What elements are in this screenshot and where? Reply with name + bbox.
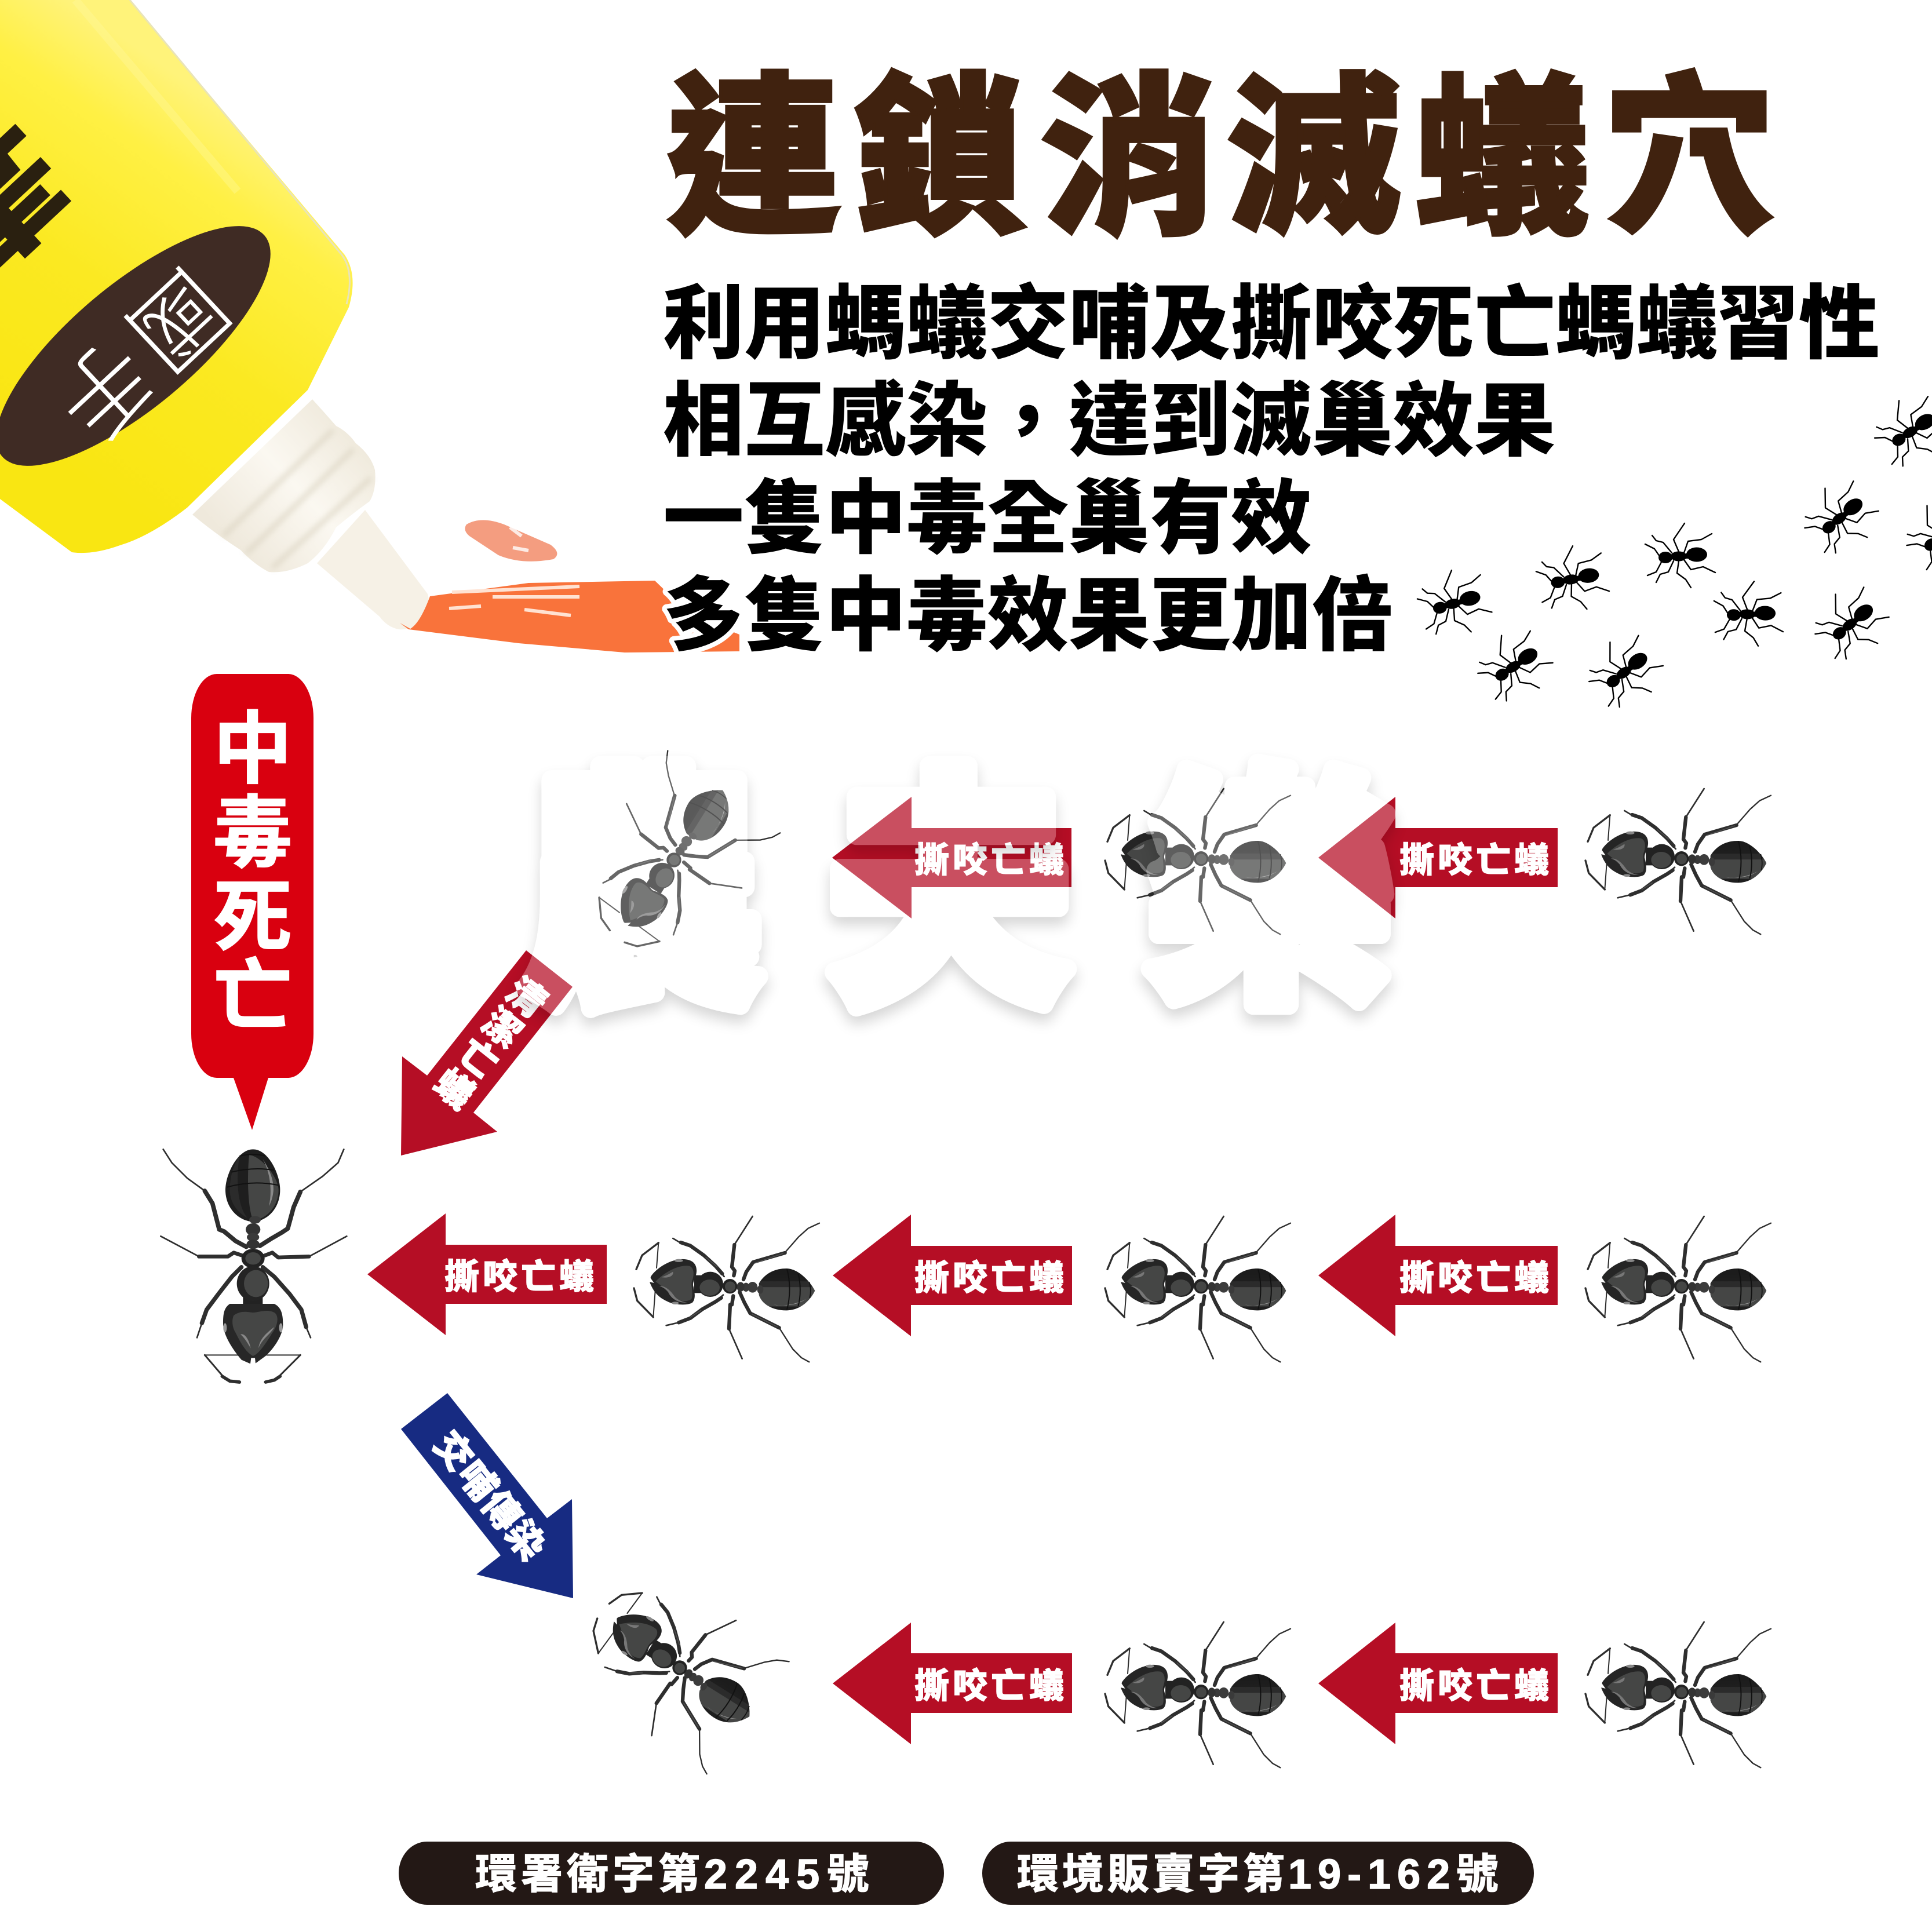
arrow: row 1 first: 撕咬亡蟻 bbox=[914, 841, 1064, 880]
row 2 ant: middle bbox=[1105, 1216, 1291, 1362]
permit pill: right bbox=[982, 1842, 1534, 1905]
permit pill: right: 環境販賣字第19-162號 bbox=[1017, 1851, 1498, 1898]
arrow: row 1 first bbox=[832, 797, 1071, 918]
arrow: row 2 second bbox=[833, 1215, 1072, 1336]
line 3: 一隻中毒全巢有效 bbox=[663, 473, 1312, 564]
arrow: row 2 third bbox=[1318, 1215, 1558, 1336]
arrow: clean dead ants diagonal: 潔 bbox=[475, 1000, 530, 1056]
callout: poisoned death bbox=[191, 674, 314, 1130]
callout text: 中 bbox=[213, 705, 292, 793]
row 1 ant: right bbox=[1585, 789, 1771, 934]
callout text: 亡 bbox=[213, 952, 292, 1040]
permit pill: left bbox=[399, 1842, 944, 1905]
arrow: row 2 second: 撕咬亡蟻 bbox=[914, 1259, 1064, 1297]
brown oval label bbox=[0, 189, 304, 503]
arrow: clean dead ants diagonal: 蟻 bbox=[427, 1061, 482, 1117]
callout text: 死 bbox=[213, 873, 292, 961]
arrow: row 3 second: 撕咬亡蟻 bbox=[1399, 1667, 1549, 1705]
orange paste bbox=[400, 520, 739, 652]
permit pill: left: 環署衛字第2245號 bbox=[475, 1851, 869, 1898]
arrow: row 2 first: 撕咬亡蟻 bbox=[444, 1257, 594, 1296]
arrow: row 2 third: 撕咬亡蟻 bbox=[1399, 1259, 1549, 1297]
row 3 ant: middle bbox=[1105, 1622, 1291, 1767]
oval label text: 國手 bbox=[27, 251, 246, 465]
arrow: row 1 second: 撕咬亡蟻 bbox=[1399, 841, 1549, 880]
row 1 ant: middle bbox=[1105, 789, 1291, 934]
arrow: row 3 second bbox=[1318, 1623, 1558, 1744]
arrow: row 2 first bbox=[367, 1213, 607, 1335]
tube body bbox=[0, 0, 353, 553]
callout text: 毒 bbox=[213, 789, 292, 877]
line 1: 利用螞蟻交哺及撕咬死亡螞蟻習性 bbox=[663, 278, 1880, 369]
tube nozzle tip bbox=[317, 510, 429, 629]
paste streak bbox=[400, 581, 739, 652]
watermark: 農夫樂 bbox=[519, 753, 1391, 1036]
title: 連鎖消滅蟻穴 bbox=[666, 61, 1789, 256]
paste blob bbox=[465, 520, 557, 562]
large poisoned ant bbox=[161, 1149, 347, 1382]
arrow: row 1 second bbox=[1318, 797, 1558, 918]
line 4: 多隻中毒效果更加倍 bbox=[663, 570, 1393, 661]
row 2 ant: right bbox=[1585, 1216, 1771, 1362]
arrow: row 3 first: 撕咬亡蟻 bbox=[914, 1667, 1064, 1705]
arrow: clean dead ants diagonal: 清 bbox=[499, 969, 553, 1026]
arrow: trophallaxis infection diagonal: 交哺傳染 bbox=[425, 1424, 554, 1569]
arrow: clean dead ants diagonal bbox=[401, 950, 573, 1155]
small ant swarm bbox=[1413, 386, 1932, 717]
row 1 ant: rotated bbox=[564, 747, 786, 982]
row 2 ant: left bbox=[634, 1216, 819, 1362]
row 3 ant: right bbox=[1585, 1622, 1771, 1767]
line 2: 相互感染，達到滅巢效果 bbox=[663, 376, 1555, 466]
arrow: row 3 first bbox=[833, 1623, 1072, 1744]
description text bbox=[663, 278, 1880, 661]
tube threaded cap bbox=[192, 399, 376, 572]
product tube bbox=[0, 0, 429, 629]
arrow: trophallaxis infection diagonal bbox=[401, 1393, 573, 1598]
row 3 ant: rotated bbox=[558, 1558, 793, 1780]
arrow: clean dead ants diagonal: 亡 bbox=[451, 1031, 505, 1087]
